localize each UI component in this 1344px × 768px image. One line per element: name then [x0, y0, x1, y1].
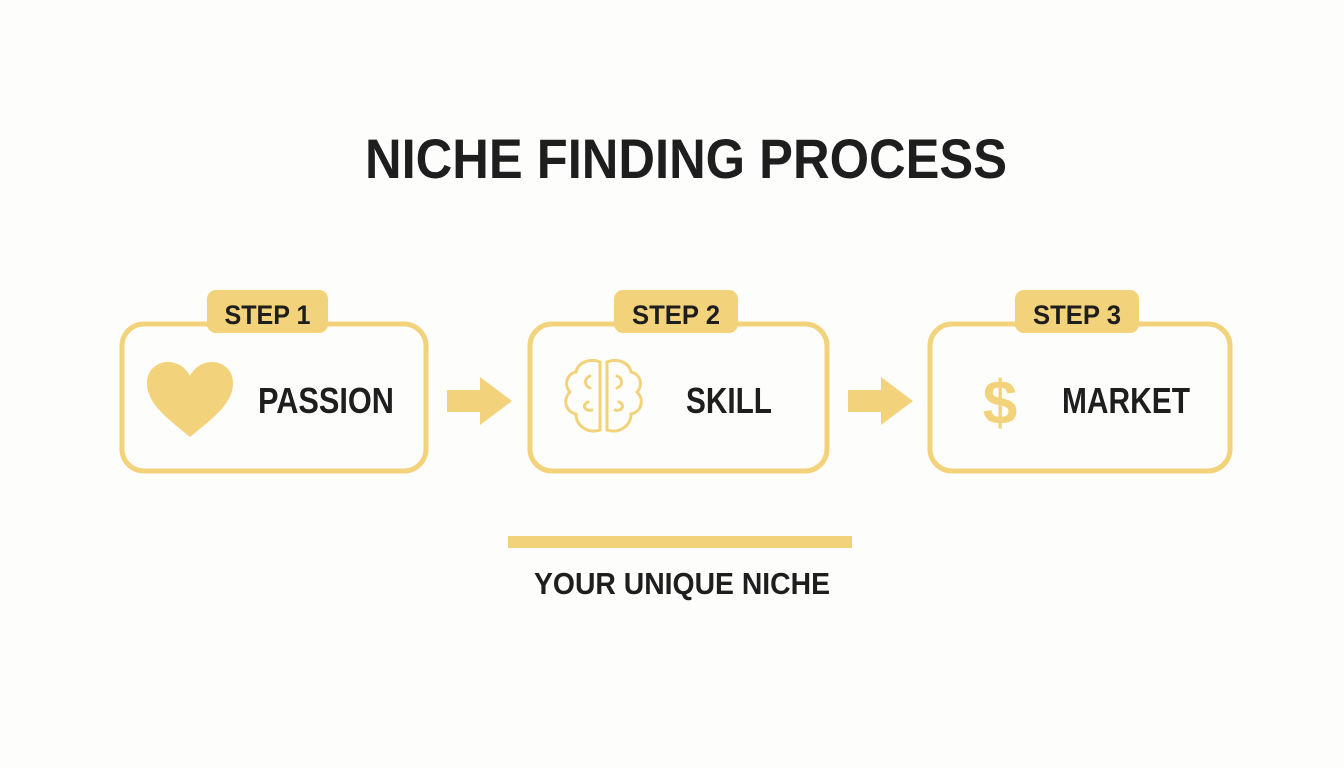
- tab: step 3: [1015, 290, 1139, 333]
- panel: step 1 passion: [122, 290, 426, 471]
- icon: heart: [147, 362, 233, 437]
- caption: your unique niche: YOUR UNIQUE NICHE: [534, 566, 830, 601]
- icon: dollar: $: [983, 369, 1017, 438]
- title: NICHE FINDING PROCESS: [365, 127, 1007, 190]
- panel: step 2 skill: [530, 290, 827, 471]
- tab: step 3: STEP 3: [1033, 300, 1121, 330]
- tab: step 2: [614, 290, 738, 333]
- bar: [508, 536, 852, 548]
- panel: step 3 market: [930, 290, 1230, 471]
- icon: brain: [566, 360, 641, 431]
- arrow 2: [848, 377, 913, 425]
- label: skill: SKILL: [686, 380, 772, 421]
- label: market: MARKET: [1062, 380, 1190, 421]
- tab: step 1: STEP 1: [224, 300, 310, 330]
- tab: step 1: [207, 290, 328, 333]
- tab: step 2: STEP 2: [632, 300, 720, 330]
- arrow 1: [447, 377, 512, 425]
- label: passion: PASSION: [258, 380, 394, 421]
